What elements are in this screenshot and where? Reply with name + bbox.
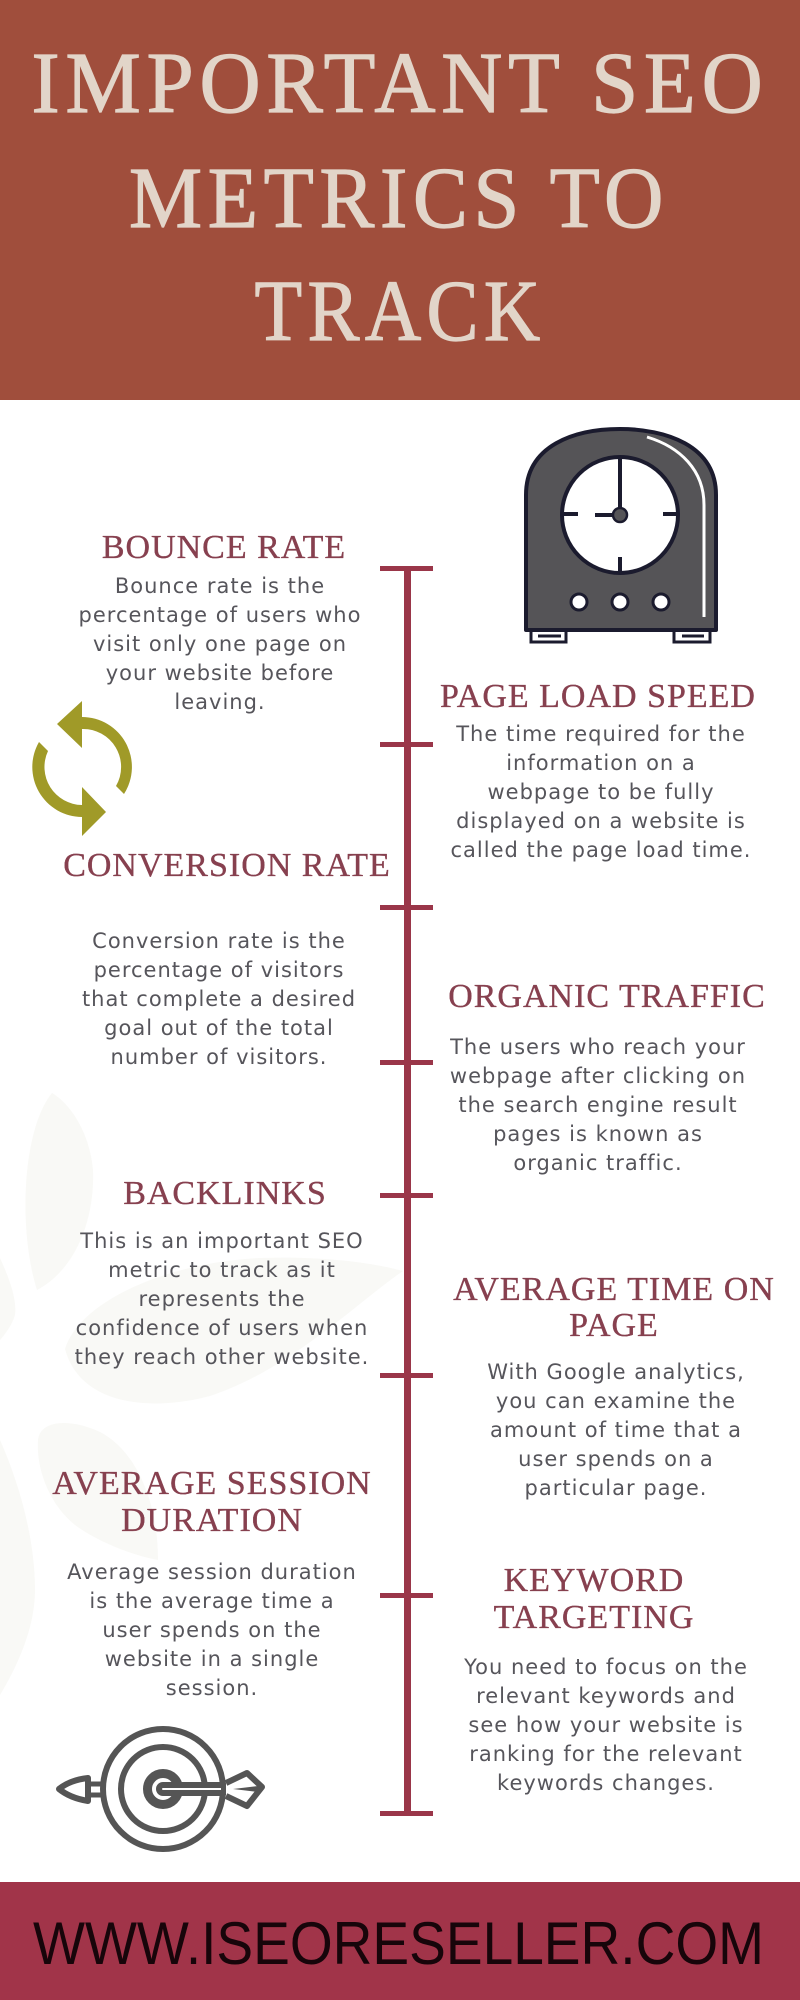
metric: conversion rate: goal out of the total [104,1016,334,1040]
metric: keyword targeting: relevant keywords and [476,1684,736,1708]
metric: organic traffic [448,978,766,1175]
metric: average time on page: With Google analytics, [487,1360,745,1384]
metric: average session duration: is the average time a [89,1589,335,1613]
title: TRACK [254,262,546,359]
metric: keyword targeting: TARGETING [494,1599,694,1636]
metric: organic traffic: pages is known as [493,1122,703,1146]
footer banner [0,1882,800,2000]
metric: organic traffic: the search engine result [458,1093,738,1117]
metric: average time on page: you can examine the [496,1389,736,1413]
metric: average time on page [453,1271,775,1500]
metric: bounce rate: your website before [106,661,334,685]
metric: bounce rate: leaving. [174,690,266,714]
metric: backlinks: metric to track as it [108,1258,336,1282]
metric: average session duration [52,1465,372,1700]
metric: average session duration: Average session duration [67,1560,357,1584]
metric: organic traffic: ORGANIC TRAFFIC [448,978,766,1015]
metric: page load speed: The time required for the [455,722,746,746]
metric: backlinks: This is an important SEO [79,1229,364,1253]
background leaves [0,1093,403,1695]
metric: keyword targeting: You need to focus on the [463,1655,748,1679]
metric: average time on page: user spends on a [518,1447,714,1471]
metric: average session duration: website in a single [105,1647,319,1671]
title: IMPORTANT SEO [32,34,768,131]
metric: backlinks: confidence of users when [76,1316,368,1340]
metric: average time on page: amount of time that a [490,1418,742,1442]
title: METRICS TO [129,149,669,246]
metric: page load speed [440,678,756,862]
header banner [0,0,800,400]
metric: organic traffic: webpage after clicking on [450,1064,746,1088]
metric: page load speed: called the page load time. [451,838,751,862]
metric: backlinks [75,1175,369,1369]
metric: backlinks: they reach other website. [75,1345,369,1369]
metric: bounce rate: percentage of users who [79,603,361,627]
metric: keyword targeting: KEYWORD [504,1562,684,1599]
metric: conversion rate: CONVERSION RATE [63,847,391,884]
icon: target with arrow [59,1729,262,1849]
metric: keyword targeting: ranking for the relevant [469,1742,743,1766]
icon: clock [526,429,716,642]
metric: page load speed: PAGE LOAD SPEED [440,678,756,715]
metric: average session duration: session. [166,1676,258,1700]
metric: average time on page: AVERAGE TIME ON [453,1271,775,1308]
metric: average time on page: PAGE [569,1307,659,1344]
metric: backlinks: represents the [138,1287,306,1311]
metric: backlinks: BACKLINKS [123,1175,327,1212]
metric: conversion rate: Conversion rate is the [92,929,346,953]
metric: average session duration: user spends on the [102,1618,322,1642]
metric: page load speed: information on a [506,751,696,775]
timeline [380,566,433,1816]
icon: refresh arrows [32,701,132,836]
metric: organic traffic: organic traffic. [513,1151,683,1175]
metric: conversion rate: that complete a desired [82,987,356,1011]
metric: bounce rate: visit only one page on [93,632,347,656]
metric: organic traffic: The users who reach your [449,1035,746,1059]
metric: conversion rate: number of visitors. [111,1045,327,1069]
metric: average time on page: particular page. [525,1476,707,1500]
metric: bounce rate: BOUNCE RATE [102,529,346,566]
metric: page load speed: displayed on a website is [456,809,746,833]
title [32,34,768,359]
metric: keyword targeting: keywords changes. [497,1771,715,1795]
metric: average session duration: DURATION [121,1502,303,1539]
metric: keyword targeting: see how your website is [468,1713,744,1737]
metric: page load speed: webpage to be fully [487,780,715,804]
metric: average session duration: AVERAGE SESSION [52,1465,372,1502]
metric: conversion rate [63,847,391,1069]
metric: keyword targeting [463,1562,748,1795]
metric: conversion rate: percentage of visitors [94,958,344,982]
metric: bounce rate: Bounce rate is the [115,574,325,598]
metric: bounce rate [79,529,361,714]
